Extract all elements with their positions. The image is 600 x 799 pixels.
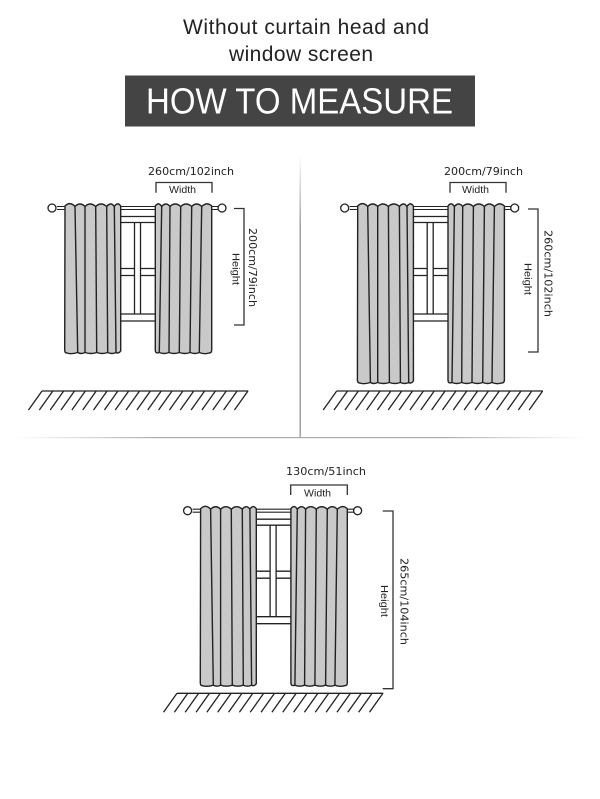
height bracket [383,511,393,689]
width bracket [291,485,347,495]
height label: Height [378,585,390,617]
height bracket [528,209,538,352]
width label: Width [169,184,196,196]
curtain panels [65,204,212,354]
window and curtain rod [341,204,519,321]
height label: Height [230,253,242,285]
height label: Height [522,263,534,295]
window and curtain rod [184,507,362,624]
diagram: 200cm by 260cm curtain [323,165,554,410]
divider: vertical [300,155,301,437]
width label: Width [462,184,489,196]
divider: horizontal [15,437,585,438]
height value: 200cm/79inch [246,228,259,307]
width value: 260cm/102inch [148,165,234,178]
curtain panels [200,506,347,686]
height bracket [234,208,244,325]
height value: 265cm/104inch [398,558,410,645]
width bracket [156,182,212,193]
diagram: 260cm by 200cm curtain [28,165,259,410]
floor [28,391,248,410]
window and curtain rod [48,204,226,321]
floor [164,693,383,712]
note: without curtain head and window screen [183,16,429,66]
note: without curtain head and window screen: window screen [228,43,373,66]
width value: 200cm/79inch [444,165,523,178]
diagram: 130cm by 265cm curtain [164,465,410,712]
width value: 130cm/51inch [286,465,366,478]
curtain panels [357,204,504,384]
width label: Width [304,488,331,500]
height value: 260cm/102inch [542,230,554,317]
floor [323,391,543,410]
note: without curtain head and window screen: Without curtain head and [183,16,429,39]
width bracket [450,182,506,193]
title banner: how to measure: HOW TO MEASURE [146,80,453,122]
